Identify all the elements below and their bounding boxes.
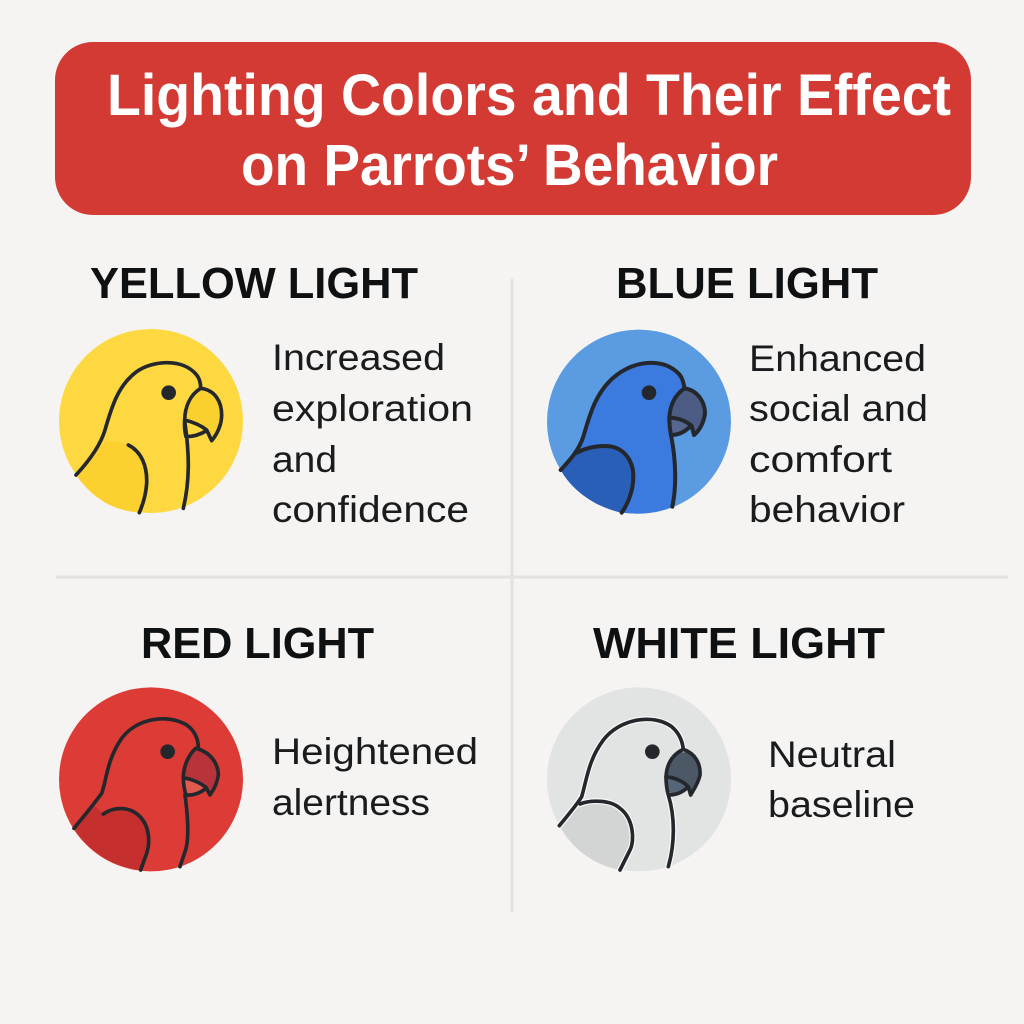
icon: red parrot xyxy=(59,687,243,871)
text: blue effect xyxy=(749,338,928,530)
text: blue effect: social and xyxy=(749,388,928,429)
panel: white light xyxy=(547,619,915,871)
text: yellow effect: and xyxy=(272,439,337,480)
heading: white light: WHITE LIGHT xyxy=(593,619,885,668)
text: yellow effect: exploration xyxy=(272,388,473,429)
icon: white parrot xyxy=(547,687,731,871)
text: white effect xyxy=(768,734,915,825)
icon: blue parrot xyxy=(547,330,731,514)
text: blue effect: comfort xyxy=(749,439,893,480)
panel: blue light xyxy=(547,259,928,530)
text: white effect: baseline xyxy=(768,784,915,825)
text: white effect: Neutral xyxy=(768,734,896,775)
icon: yellow parrot xyxy=(59,329,243,513)
panel: red light xyxy=(59,619,478,871)
panel: yellow light xyxy=(59,259,473,530)
title banner xyxy=(55,42,971,215)
title banner: on Parrots’ Behavior xyxy=(241,133,778,198)
heading: red light: RED LIGHT xyxy=(141,619,374,668)
text: red effect xyxy=(272,731,478,823)
heading: yellow light: YELLOW LIGHT xyxy=(90,259,418,308)
text: red effect: alertness xyxy=(272,782,430,823)
text: yellow effect xyxy=(272,337,473,530)
text: red effect: Heightened xyxy=(272,731,478,772)
text: blue effect: behavior xyxy=(749,489,905,530)
heading: blue light: BLUE LIGHT xyxy=(616,259,878,308)
text: yellow effect: Increased xyxy=(272,337,445,378)
text: yellow effect: confidence xyxy=(272,489,469,530)
text: blue effect: Enhanced xyxy=(749,338,926,379)
title banner: Lighting Colors and Their Effect xyxy=(107,63,951,128)
